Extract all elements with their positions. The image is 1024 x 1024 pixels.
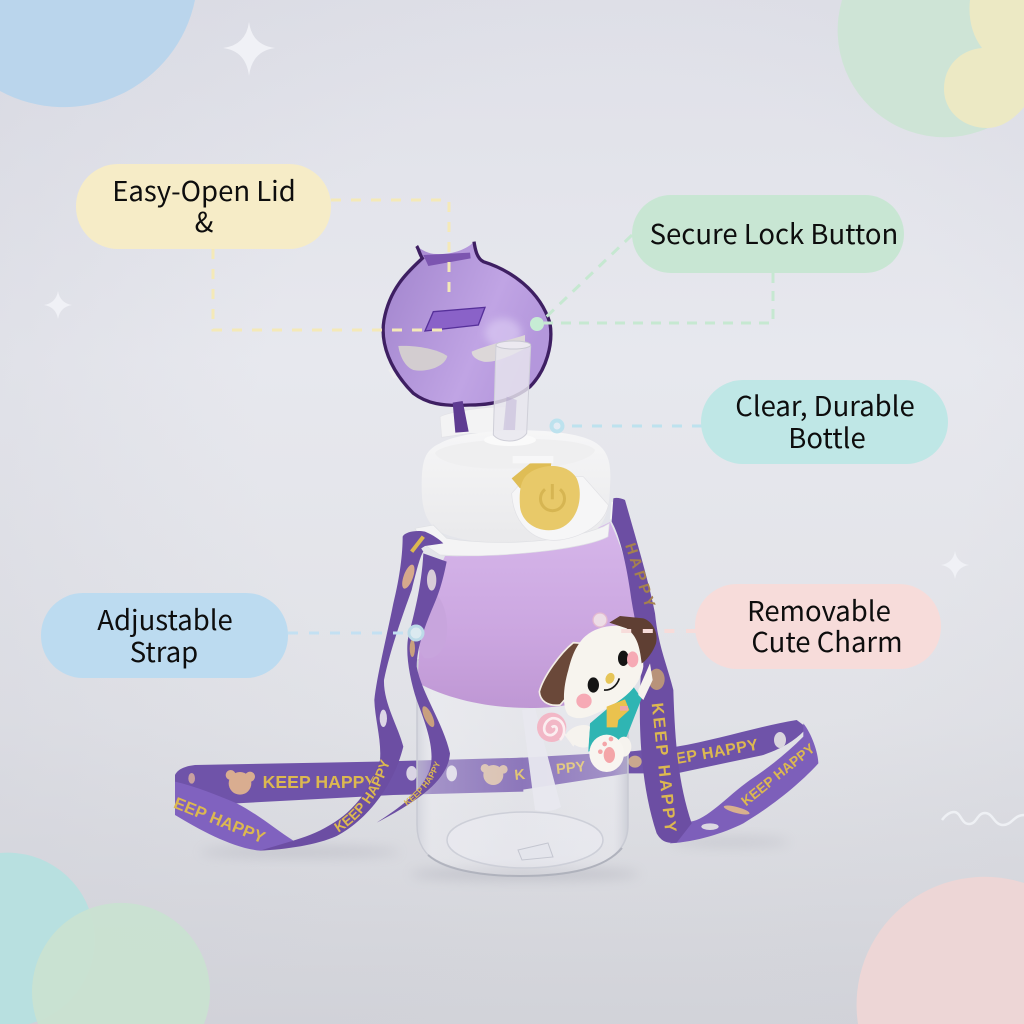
- bottle: [415, 407, 635, 876]
- cheeks: [576, 651, 638, 708]
- label: clear durable bottle: Bottle: [788, 416, 866, 456]
- collar: [415, 523, 609, 556]
- straw seat: [484, 434, 536, 446]
- strap: front strands left: KEEP HAPPY: [334, 759, 389, 832]
- strap prints: [400, 563, 417, 590]
- lollipop: [537, 713, 580, 747]
- strap: back section, right: EP HAPPY: [674, 737, 760, 768]
- lid shell: [383, 242, 551, 405]
- sleeve side handle: [419, 595, 447, 658]
- bottle bottom rim: [428, 848, 622, 876]
- label: easy-open lid: [76, 164, 331, 249]
- label: secure lock button: [632, 195, 904, 273]
- label: easy-open lid: &: [195, 200, 214, 240]
- eyes: [588, 651, 629, 693]
- label: easy-open lid: Easy-Open Lid: [112, 169, 296, 209]
- strap: back section, right: KEEP HAPPY: [738, 740, 818, 809]
- top loop: [403, 531, 443, 553]
- label: removable cute charm: Removable: [747, 589, 891, 629]
- cap top: [435, 439, 595, 469]
- strap: front strand right: [612, 498, 692, 843]
- button ring: [512, 477, 608, 540]
- strand b: [377, 553, 450, 823]
- ground shadows: [200, 837, 790, 880]
- left ear: [539, 643, 582, 705]
- base nub: [518, 843, 553, 860]
- strap: front strands left: [260, 531, 450, 851]
- strand a: [260, 537, 423, 851]
- head: [564, 626, 643, 718]
- power icon: [540, 484, 564, 511]
- strap: front strands left: KEEP HAPPY: [404, 761, 440, 806]
- label: adjustable strap: Strap: [130, 630, 198, 670]
- foot: [589, 735, 624, 772]
- button tab: [512, 460, 552, 488]
- cap side: [422, 430, 610, 544]
- connector: adjustable strap: [288, 626, 423, 640]
- strap: back section, right: PPY: [555, 759, 586, 778]
- charm: [537, 613, 657, 772]
- hinge tab behind lid: [388, 365, 407, 378]
- label: removable cute charm: [695, 584, 941, 669]
- bottle base: [447, 812, 603, 868]
- label: secure lock button: Secure Lock Button: [650, 212, 898, 252]
- sparkles and squiggle: [44, 22, 1024, 825]
- connector: clear bottle: [552, 420, 702, 432]
- highlight: [485, 318, 522, 348]
- strap: back section, left: EEP HAPPY: [171, 793, 268, 847]
- window: [425, 307, 485, 331]
- strap: back section, right: K: [514, 767, 526, 784]
- ring: [593, 613, 607, 627]
- straw: [493, 341, 531, 441]
- strap: back section, left: KEEP HAPPY: [263, 772, 376, 792]
- top tab: [423, 253, 471, 266]
- inner straw: [522, 708, 561, 811]
- lid rim: [383, 242, 551, 405]
- label: removable cute charm: Cute Charm: [751, 620, 903, 660]
- nose and mouth: [604, 671, 619, 690]
- right ear: [609, 616, 657, 663]
- purple lid: [383, 242, 551, 433]
- purple hinge clip: [453, 401, 469, 433]
- white cap: [415, 407, 624, 556]
- hand: [567, 725, 590, 748]
- purple sleeve: [418, 522, 635, 708]
- clear bottle body: [417, 640, 628, 876]
- body: [588, 687, 642, 752]
- connector: charm: [617, 629, 696, 633]
- second foot: [617, 737, 631, 757]
- label: adjustable strap: [41, 593, 288, 678]
- hinge: [440, 407, 507, 437]
- strap: back section, left: [171, 758, 523, 851]
- strap: front strand right: KEEP HAPPY: [648, 702, 680, 833]
- arm: [638, 663, 653, 700]
- label: clear durable bottle: [701, 380, 948, 464]
- lock button: [520, 466, 580, 530]
- left seal: [398, 346, 447, 371]
- collar lug: [610, 502, 624, 519]
- label: clear durable bottle: Clear, Durable: [735, 384, 915, 424]
- connector: easy-open lid: [213, 200, 449, 330]
- strap: front strand right: HAPPY: [621, 541, 658, 610]
- label: adjustable strap: Adjustable: [97, 598, 233, 638]
- right seal: [472, 335, 525, 362]
- gift: [607, 699, 629, 727]
- strap: back section, right: [510, 720, 818, 843]
- connector: secure lock button: [530, 235, 773, 331]
